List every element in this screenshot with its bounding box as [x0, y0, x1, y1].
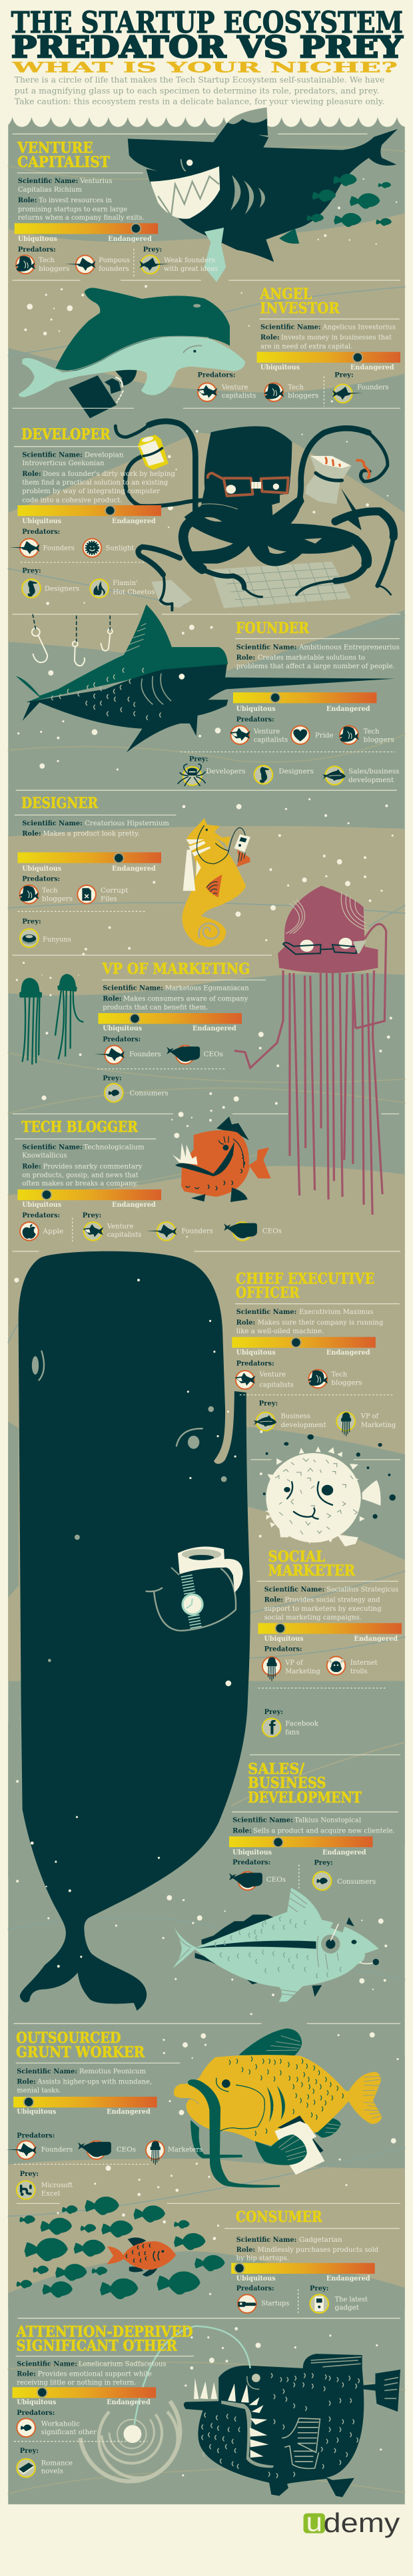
chart: population scale: [17, 505, 161, 525]
predators and prey: [178, 716, 399, 786]
predators and prey: with great ideas: [164, 265, 218, 273]
predators and prey: Tech: [42, 887, 58, 895]
chart: population scale: Endangered: [112, 1201, 156, 1209]
predators and prey: Founders: [43, 544, 75, 552]
text: grunt worker description: Role:: [17, 2078, 36, 2086]
chart: population scale: Ubiquitous: [17, 2108, 56, 2116]
text: ceo description: Makes sure their company is running: [258, 1319, 384, 1327]
text: designer description: Role:: [22, 830, 41, 838]
text: social marketer description: Scientific Name:: [264, 1586, 324, 1594]
chart: population scale: Endangered: [350, 363, 394, 371]
heading: attention-deprived significant other: ATTENTION-DEPRIVED: [16, 2323, 193, 2340]
predators and prey: fans: [285, 1729, 300, 1737]
text: venture capitalist description: Capitalias Richium: [18, 186, 82, 194]
heading: sales business development: [232, 1761, 398, 1812]
text: founder description: Ambitionous Entrepreneurius: [298, 643, 400, 651]
predators and prey: trolls: [350, 1667, 368, 1675]
illustration: ceo sperm whale: [14, 1251, 250, 2011]
text: venture capitalist description: Role:: [18, 196, 37, 204]
illustration: vp of marketing jellyfish: [234, 886, 386, 1215]
predators and prey: Funyuns: [43, 935, 71, 943]
predators and prey: bloggers: [42, 895, 73, 903]
text: developer description: them find a practical solution to an existing: [22, 479, 169, 487]
illustration: developer octopus: [115, 421, 394, 610]
text: significant other description: Lonelicarium Sadfacetous: [79, 2360, 167, 2368]
predators and prey: Prey:: [189, 755, 208, 763]
predators and prey: Prey:: [314, 1859, 333, 1867]
predators and prey: novels: [41, 2468, 63, 2475]
predators and prey: Predators:: [236, 2284, 274, 2292]
logo: udemy: [304, 2507, 400, 2538]
text: significant other description: [17, 2360, 167, 2386]
illustration: significant other anglerfish: [81, 2326, 400, 2497]
predators and prey: Predators:: [264, 1645, 302, 1653]
chart: population scale: Ubiquitous: [22, 865, 61, 873]
predators and prey: Prey:: [259, 1399, 278, 1407]
predators and prey: Prey:: [22, 918, 41, 926]
chart: population scale: Endangered: [326, 705, 370, 713]
chart: population scale: Ubiquitous: [264, 1635, 304, 1643]
section: outsourced grunt worker: [6, 2024, 400, 2199]
chart: population scale: Ubiquitous: [260, 363, 300, 371]
predators and prey: [235, 1359, 396, 1436]
text: tech blogger description: [22, 1143, 145, 1187]
text: vp of marketing description: Scientific Name:: [103, 984, 163, 992]
predators and prey: [20, 1211, 282, 1241]
predators and prey: bloggers: [364, 736, 394, 744]
heading: venture capitalist: VENTURE: [17, 139, 93, 156]
chart: population scale: [17, 852, 161, 873]
chart: population scale: Ubiquitous: [22, 1201, 61, 1209]
section: consumer: [17, 2203, 400, 2318]
text: social marketer description: [264, 1586, 398, 1621]
predators and prey: [197, 371, 389, 407]
intro text: [15, 75, 384, 107]
predators and prey: CEOs: [262, 1227, 282, 1235]
text: social marketer description: Provides social strategy and: [284, 1596, 380, 1604]
predators and prey: Tech: [331, 1371, 348, 1379]
text: founder description: Role:: [236, 654, 255, 662]
heading: angel investor: [259, 286, 400, 319]
chart: population scale: Ubiquitous: [236, 2274, 276, 2282]
predators and prey: Designers: [278, 767, 314, 775]
text: vp of marketing description: products that can benefit them.: [103, 1003, 208, 1011]
chart: population scale: [231, 2262, 375, 2282]
predators and prey: Prey:: [22, 567, 41, 575]
predators and prey: Apple: [42, 1227, 63, 1235]
predators and prey: Prey:: [20, 2170, 39, 2178]
chart: population scale: Endangered: [326, 2274, 370, 2282]
illustration: sales tuna: [172, 1888, 379, 2002]
predators and prey: [17, 875, 146, 947]
intro text: put a magnifying glass up to each specimen to determine its role, predators, and prey.: [15, 86, 379, 95]
predators and prey: Excel: [41, 2189, 60, 2197]
chart: population scale: [13, 2097, 157, 2116]
predators and prey: Files: [101, 895, 117, 903]
predators and prey: Prey:: [143, 246, 162, 254]
title block: PREDATOR VS PREY: [11, 30, 404, 65]
chart: population scale: [13, 2387, 156, 2406]
heading: angel investor: ANGEL: [259, 286, 312, 303]
text: venture capitalist description: Venturius: [79, 177, 112, 185]
predators and prey: Microsoft: [41, 2181, 73, 2189]
predators and prey: significant other: [41, 2428, 97, 2436]
predators and prey: Marketing: [285, 1667, 320, 1675]
text: significant other description: receiving little or nothing in return.: [17, 2378, 136, 2386]
illustration: consumer fish school: [17, 2197, 224, 2299]
text: social marketer description: Socialitus Strategicus: [326, 1586, 398, 1594]
predators and prey: f: [268, 1717, 276, 1739]
text: tech blogger description: Provides snarky commentary: [43, 1162, 143, 1170]
text: venture capitalist description: Scientific Name:: [18, 177, 78, 185]
illustration: social marketer pufferfish: [259, 1430, 396, 1546]
predators and prey: capitalists: [222, 391, 256, 399]
text: significant other description: Scientific Name:: [17, 2360, 77, 2368]
chart: population scale: [17, 1189, 161, 1209]
text: sales description: Sells a product and acquire new clientele.: [253, 1826, 395, 1834]
predators and prey: [94, 1035, 225, 1102]
text: angel investor description: [260, 323, 396, 351]
chart: population scale: Ubiquitous: [236, 705, 276, 713]
predators and prey: Facebook: [285, 1720, 319, 1728]
predators and prey: Consumers: [337, 1878, 376, 1886]
predators and prey: Predators:: [17, 2131, 55, 2139]
text: vp of marketing description: Role:: [103, 994, 122, 1002]
predators and prey: CEOs: [266, 1876, 286, 1884]
predators and prey: Pompous: [99, 256, 130, 264]
section: angel investor: [13, 286, 400, 408]
predators and prey: Predators:: [17, 2409, 55, 2417]
chart: population scale: Endangered: [112, 865, 156, 873]
chart: population scale: [15, 223, 158, 243]
text: ceo description: Executivium Maximus: [299, 1308, 373, 1316]
chart: population scale: Ubiquitous: [232, 1848, 272, 1856]
heading: venture capitalist: CAPITALIST: [17, 154, 110, 171]
predators and prey: Designers: [45, 585, 79, 593]
chart: population scale: [258, 1623, 402, 1643]
heading: chief executive officer: CHIEF EXECUTIVE: [236, 1271, 374, 1288]
text: consumer description: Role:: [236, 2246, 255, 2254]
text: venture capitalist description: To invest resources in: [39, 196, 112, 204]
text: consumer description: Scientific Name:: [236, 2236, 296, 2244]
illustration: developer keyboard and mouse: [151, 562, 351, 608]
heading: consumer: CONSUMER: [236, 2209, 322, 2226]
predators and prey: [236, 2284, 368, 2313]
text: tech blogger description: Role:: [22, 1162, 41, 1170]
title block: [11, 6, 404, 77]
predators and prey: Weak founders: [164, 256, 215, 264]
heading: chief executive officer: [235, 1271, 400, 1304]
predators and prey: Prey:: [264, 1708, 283, 1716]
predators and prey: development: [348, 776, 394, 784]
illustration: tech blogger anglerfish: [173, 1116, 270, 1202]
predators and prey: Consumers: [130, 1089, 169, 1097]
heading: sales business development: DEVELOPMENT: [248, 1789, 362, 1807]
predators and prey: capitalists: [254, 736, 288, 744]
predators and prey: Flamin': [113, 579, 138, 587]
chart: population scale: [232, 1337, 376, 1357]
predators and prey: VP of: [284, 1659, 304, 1667]
predators and prey: Corrupt: [101, 887, 129, 895]
text: angel investor description: Invests money in businesses that: [281, 333, 392, 341]
predators and prey: Marketing: [361, 1421, 396, 1429]
chart: population scale: Endangered: [322, 1848, 366, 1856]
predators and prey: Business: [281, 1412, 310, 1420]
text: angel investor description: Scientific Name:: [260, 323, 321, 331]
text: founder description: Creates marketable solutions to: [258, 654, 365, 662]
text: significant other description: Provides emotional support while: [38, 2370, 152, 2378]
intro text: There is a circle of life that makes the Tech Startup Ecosystem self-sustainable. We have: [15, 75, 384, 85]
chart: population scale: Endangered: [112, 517, 156, 525]
text: venture capitalist description: returns when a company finally exits.: [18, 214, 145, 222]
section: designer: [13, 795, 272, 955]
predators and prey: CEOs: [117, 2145, 136, 2153]
predators and prey: Venture: [221, 383, 248, 391]
chart: population scale: Endangered: [107, 2108, 151, 2116]
chart: population scale: Endangered: [326, 1349, 370, 1357]
illustration: grunt worker goldfish: [174, 2028, 382, 2188]
predators and prey: VP of: [360, 1412, 379, 1420]
text: ceo description: [236, 1308, 384, 1335]
text: tech blogger description: often makes or breaks a company.: [22, 1180, 138, 1187]
predators and prey: Predators:: [103, 1035, 141, 1043]
text: angel investor description: Role:: [260, 333, 280, 341]
section: founder: [16, 620, 400, 790]
section: vp of marketing: [13, 961, 399, 1114]
predators and prey: Predators:: [236, 716, 274, 724]
predators and prey: Founders: [129, 1050, 161, 1058]
predators and prey: [6, 2131, 203, 2199]
predators and prey: Prey:: [83, 1211, 101, 1219]
text: grunt worker description: [17, 2067, 152, 2095]
text: developer description: Does a founder's dirty work by helping: [43, 470, 175, 478]
text: consumer description: by hip startups.: [236, 2254, 289, 2262]
chart: population scale: [98, 1013, 242, 1032]
predators and prey: Prey:: [334, 371, 354, 379]
heading: social marketer: [257, 1548, 398, 1582]
text: tech blogger description: Technologicalium: [83, 1143, 145, 1151]
text: developer description: code into a cohesive product.: [22, 496, 122, 504]
predators and prey: Predators:: [22, 528, 60, 536]
text: developer description: [22, 451, 175, 504]
predators and prey: Predators:: [232, 1858, 270, 1866]
heading: outsourced grunt worker: OUTSOURCED: [16, 2030, 121, 2047]
section: developer: [9, 426, 400, 614]
predators and prey: Hot Cheetos: [113, 588, 155, 596]
text: developer description: Introverticus Geekonian: [22, 459, 105, 467]
text: developer description: Scientific Name:: [22, 451, 83, 459]
predators and prey: [14, 2409, 147, 2477]
heading: attention-deprived significant other: SIGNIFICANT OTHER: [17, 2337, 177, 2354]
text: founder description: Scientific Name:: [236, 643, 296, 651]
predators and prey: Workaholic: [41, 2420, 80, 2428]
text: social marketer description: support to marketers by executing: [264, 1605, 382, 1613]
intro text: Take caution: this ecosystem rests in a delicate balance, for your viewing pleasure only.: [15, 97, 384, 107]
text: developer description: problem by way of integrating computer: [22, 487, 160, 495]
text: designer description: Makes a product look pretty.: [43, 830, 140, 838]
predators and prey: Venture: [107, 1222, 133, 1230]
chart: population scale: Ubiquitous: [103, 1024, 142, 1032]
text: designer description: Creatorious Hipsternium: [85, 819, 169, 827]
heading: outsourced grunt worker: GRUNT WORKER: [16, 2044, 145, 2061]
section: attention-deprived significant other: [13, 2323, 194, 2477]
text: social marketer description: Role:: [264, 1596, 283, 1604]
illustration: angel investor dolphin: [19, 288, 245, 418]
predators and prey: Romance: [41, 2459, 73, 2467]
text: designer description: Scientific Name:: [22, 819, 83, 827]
text: designer description: [22, 819, 169, 838]
predators and prey: [9, 528, 155, 598]
text: vp of marketing description: [103, 984, 249, 1011]
illustration: founder marlin: [16, 604, 395, 752]
predators and prey: Venture: [259, 1371, 286, 1379]
heading: sales business development: BUSINESS: [248, 1775, 326, 1792]
text: consumer description: [236, 2236, 379, 2262]
heading: tech blogger: TECH BLOGGER: [21, 1118, 138, 1136]
text: tech blogger description: Knowitallicus: [22, 1152, 67, 1160]
text: ceo description: Role:: [236, 1319, 255, 1327]
predators and prey: The latest: [335, 2295, 368, 2303]
predators and prey: [15, 246, 218, 276]
text: sales description: Scientific Name:: [232, 1817, 293, 1825]
heading: designer: DESIGNER: [21, 795, 99, 812]
logo: udemy: demy: [324, 2507, 400, 2538]
section: sales / business development: [229, 1755, 400, 1890]
chart: population scale: Endangered: [108, 235, 152, 243]
text: developer description: Developian: [85, 451, 124, 459]
heading: vp of marketing: VP OF MARKETING: [102, 961, 250, 978]
section: social marketer: [257, 1548, 402, 1739]
predators and prey: Founders: [357, 383, 389, 391]
text: sales description: Role:: [232, 1826, 252, 1834]
title block: WHAT IS YOUR NICHE?: [11, 60, 398, 77]
text: ceo description: like a well-oiled machine.: [236, 1327, 324, 1335]
predators and prey: gadget: [335, 2304, 360, 2312]
chart: population scale: [233, 692, 376, 713]
predators and prey: capitalists: [259, 1381, 294, 1389]
text: developer description: Role:: [22, 470, 41, 478]
text: sales description: Talkius Nonstopical: [294, 1817, 361, 1825]
text: consumer description: Mindlessly purchases products sold: [257, 2246, 379, 2254]
predators and prey: development: [281, 1421, 326, 1429]
text: grunt worker description: menial tasks.: [17, 2087, 61, 2095]
heading: social marketer: SOCIAL: [268, 1548, 325, 1566]
section: chief executive officer: [232, 1271, 400, 1460]
text: social marketer description: social marketing campaigns.: [264, 1613, 362, 1621]
predators and prey: Predators:: [22, 1211, 60, 1219]
heading: developer: DEVELOPER: [21, 426, 111, 443]
text: sales description: [232, 1817, 395, 1834]
predators and prey: Sunlight: [106, 544, 135, 552]
heading: angel investor: INVESTOR: [260, 300, 340, 318]
predators and prey: Founders: [181, 1227, 213, 1235]
predators and prey: Startups: [261, 2299, 289, 2307]
text: grunt worker description: Remotius Peonicum: [79, 2067, 146, 2075]
chart: population scale: Endangered: [193, 1024, 236, 1032]
text: vp of marketing description: Marketous Egomaniacan: [165, 984, 249, 992]
chart: population scale: [257, 352, 400, 371]
text: significant other description: Role:: [17, 2370, 36, 2378]
predators and prey: bloggers: [331, 1379, 362, 1387]
wave surface: [0, 110, 413, 127]
text: ceo description: Scientific Name:: [236, 1308, 296, 1316]
heading: outsourced grunt worker: [16, 2030, 180, 2063]
text: venture capitalist description: promising startups to earn large: [18, 206, 127, 214]
chart: population scale: Ubiquitous: [17, 2398, 56, 2406]
text: tech blogger description: on products, gossip, and news that: [22, 1171, 139, 1179]
chart: population scale: Ubiquitous: [22, 517, 61, 525]
predators and prey: Sales/business: [348, 767, 399, 775]
predators and prey: Prey:: [20, 2447, 39, 2455]
predators and prey: Tech: [39, 256, 55, 264]
text: vp of marketing description: Makes consumers aware of company: [123, 994, 248, 1002]
illustration: small fish school by shark: [306, 174, 392, 227]
text: grunt worker description: Assists higher-ups with mundane,: [37, 2078, 152, 2086]
chart: population scale: Ubiquitous: [18, 235, 57, 243]
chart: population scale: Endangered: [107, 2398, 151, 2406]
text: founder description: problems that affect a large number of people.: [236, 662, 395, 670]
text: tech blogger description: Scientific Name:: [22, 1143, 83, 1151]
predators and prey: [229, 1858, 376, 1890]
predators and prey: Venture: [253, 728, 280, 736]
heading: social marketer: MARKETER: [268, 1562, 356, 1580]
predators and prey: Pride: [315, 732, 334, 740]
section: tech blogger: [13, 1118, 400, 1251]
predators and prey: Developers: [206, 767, 246, 775]
heading: attention-deprived significant other: [16, 2323, 194, 2356]
predators and prey: Predators:: [236, 1359, 274, 1367]
predators and prey: Prey:: [310, 2284, 328, 2292]
predators and prey: bloggers: [288, 391, 318, 399]
heading: founder: FOUNDER: [236, 620, 309, 637]
illustration: small jellyfish: [19, 974, 83, 1064]
text: grunt worker description: Scientific Name:: [17, 2067, 77, 2075]
illustration: venture capitalist shark: [128, 107, 398, 282]
predators and prey: Predators:: [22, 875, 60, 883]
predators and prey: [258, 1645, 387, 1739]
text: founder description: [236, 643, 400, 670]
text: venture capitalist description: [18, 177, 145, 222]
predators and prey: Tech: [288, 383, 304, 391]
predators and prey: Prey:: [103, 1074, 122, 1082]
text: consumer description: Gadgetarian: [299, 2236, 342, 2244]
predators and prey: Predators:: [18, 246, 56, 254]
heading: chief executive officer: OFFICER: [236, 1285, 300, 1302]
predators and prey: founders: [99, 265, 129, 273]
heading: venture capitalist: [17, 139, 143, 173]
predators and prey: Tech: [364, 728, 380, 736]
heading: sales business development: SALES/: [248, 1761, 305, 1778]
text: angel investor description: are in need of extra capital.: [260, 343, 352, 351]
predators and prey: bloggers: [39, 265, 69, 273]
chart: population scale: Ubiquitous: [236, 1349, 276, 1357]
chart: population scale: Endangered: [354, 1635, 398, 1643]
predators and prey: Marketers: [168, 2145, 203, 2153]
predators and prey: Founders: [41, 2145, 73, 2153]
logo: udemy: u: [306, 2508, 322, 2537]
text: angel investor description: Angelicus Investorius: [322, 323, 396, 331]
section: venture capitalist: [13, 134, 400, 280]
illustration: designer seahorse: [182, 818, 250, 947]
predators and prey: Internet: [350, 1659, 378, 1667]
chart: population scale: [229, 1836, 373, 1856]
predators and prey: capitalists: [107, 1231, 141, 1239]
predators and prey: Predators:: [198, 371, 235, 379]
predators and prey: CEOs: [204, 1050, 223, 1058]
